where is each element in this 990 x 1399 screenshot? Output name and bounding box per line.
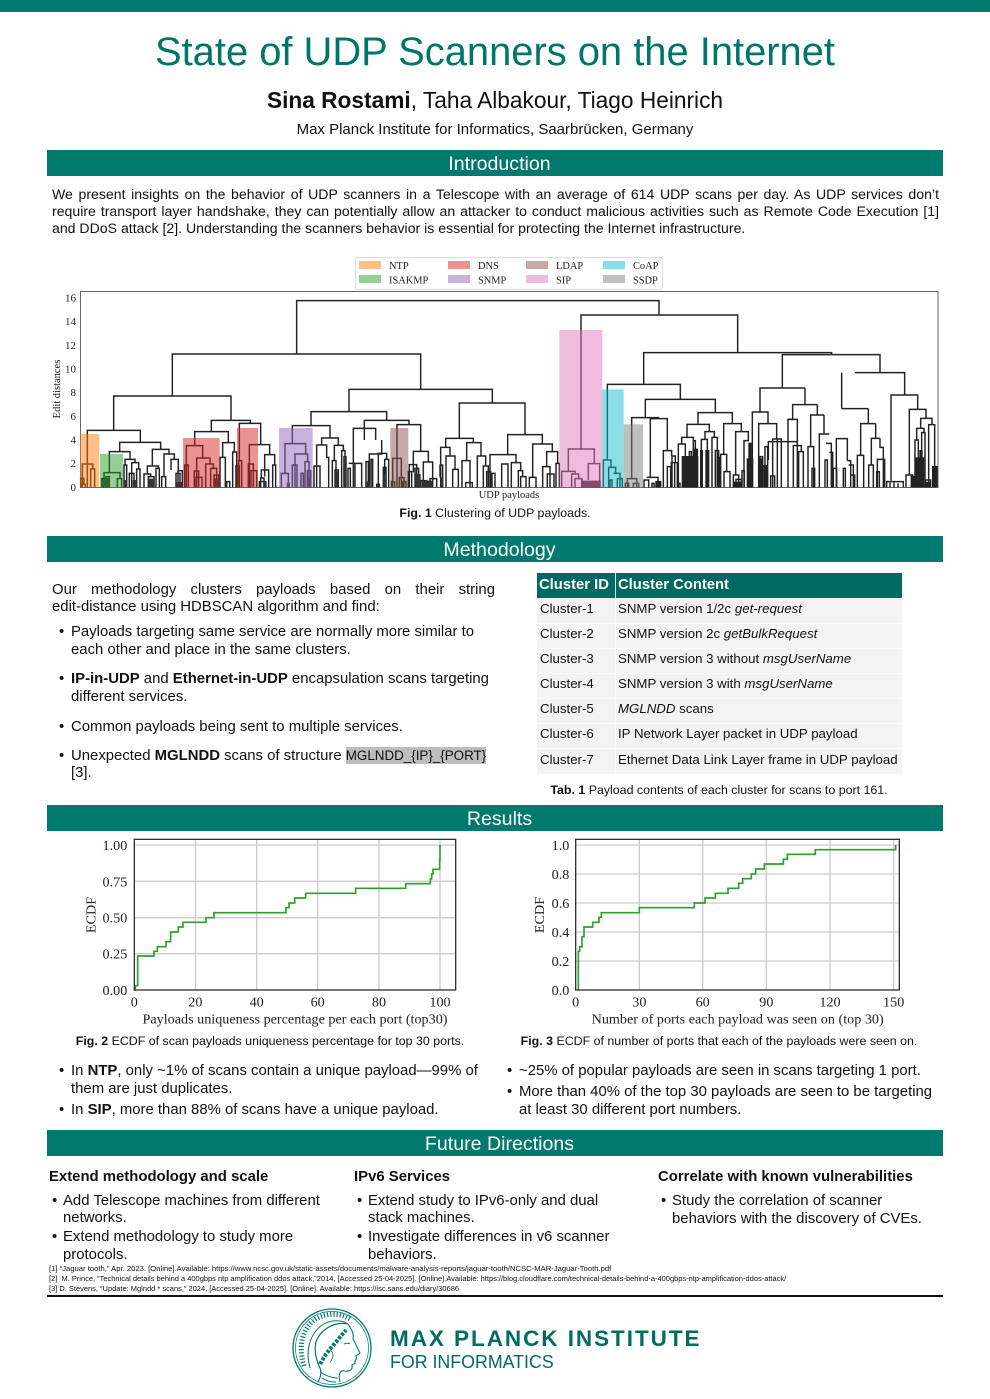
chart: ECDF ports per payload: 90	[759, 995, 773, 1011]
text block: results right: ~25% of popular payloads are seen in scans targeting 1 port.	[519, 1063, 921, 1079]
legend: DNS	[478, 261, 499, 272]
legend: SNMP	[478, 276, 507, 286]
footer rule	[47, 1295, 943, 1297]
column: correlate vulnerabilities: •	[661, 1193, 666, 1209]
table header: Cluster ID	[539, 577, 609, 593]
dendrogram dense leaves left	[101, 457, 443, 487]
table rows: Cluster-3	[540, 651, 594, 666]
table rows: SNMP version 2c getBulkRequest	[618, 626, 817, 641]
column: IPv6 services: •	[357, 1229, 362, 1245]
legend: CoAP	[633, 261, 659, 272]
top banner	[0, 0, 990, 12]
text block: results left: them are just duplicates.	[71, 1081, 232, 1097]
column: extend methodology: •	[52, 1229, 57, 1245]
table rows: IP Network Layer packet in UDP payload	[618, 726, 858, 741]
table rows: SNMP version 3 with msgUserName	[618, 676, 833, 691]
figure 3 caption: Fig. 3 ECDF of number of ports that each of the payloads were seen on.	[521, 1034, 917, 1048]
legend: SIP	[556, 276, 571, 286]
chart: dendrogram clustering of UDP payloads	[52, 257, 938, 501]
bullet list: •	[59, 624, 64, 640]
chart: ECDF payload uniqueness	[83, 838, 456, 1028]
bullet list: •	[59, 748, 64, 764]
dendrogram links left half	[81, 301, 659, 487]
axis ticks and labels	[65, 292, 76, 494]
bullet list: •	[59, 719, 64, 735]
text block: introduction	[52, 186, 939, 236]
table header	[537, 573, 902, 598]
axis ticks and labels: 14	[65, 316, 76, 328]
table rows	[540, 601, 898, 767]
references: [2] M. Prince, “Technical details behind a 400gbps ntp amplification ddos attack,”2014, [Accessed 25-04-2025]. [Online].Available: https://blog.cloudflare.com/technical-details-behind-a-400gbps-ntp-amplification-ddos-attack/	[49, 1274, 786, 1283]
chart: ECDF ports per payload: ECDF	[532, 897, 548, 933]
bullet list: different services.	[71, 689, 187, 705]
chart: ECDF payload uniqueness: 40	[250, 995, 264, 1011]
text block: results left: •	[59, 1102, 64, 1118]
service highlight regions	[80, 330, 643, 487]
bullet list: Unexpected MGLNDD scans of structure MGLNDD_{IP}_{PORT}	[71, 748, 486, 764]
column: extend methodology: Extend methodology and scale	[49, 1169, 268, 1185]
column: IPv6 services: behaviors.	[368, 1247, 437, 1263]
chart: ECDF payload uniqueness: Payloads uniqueness percentage per each port (top30)	[142, 1012, 448, 1028]
heading: Future Directions	[47, 1130, 943, 1156]
chart: ECDF payload uniqueness: 100	[429, 995, 451, 1011]
figure 1 caption: Fig. 1 Clustering of UDP payloads.	[399, 506, 591, 520]
table rows: Cluster-5	[540, 701, 594, 716]
legend: LDAP	[556, 261, 583, 272]
column: correlate vulnerabilities	[658, 1169, 922, 1227]
text block: results left: In SIP, more than 88% of scans have a unique payload.	[71, 1102, 439, 1118]
chart: ECDF ports per payload: 30	[632, 995, 646, 1011]
text block: methodology: edit-distance using HDBSCAN algorithm and find:	[52, 599, 380, 615]
chart: ECDF payload uniqueness: 80	[372, 995, 386, 1011]
column: IPv6 services: stack machines.	[368, 1210, 475, 1226]
logo wordmark: MAX PLANCK INSTITUTE	[390, 1326, 702, 1351]
bullet list	[59, 624, 489, 781]
text block: results right: More than 40% of the top 30 payloads are seen to be targeting	[519, 1084, 932, 1100]
table rows: Cluster-4	[540, 676, 594, 691]
table rows: MGLNDD scans	[618, 701, 714, 716]
text block: results right	[507, 1063, 932, 1118]
table caption: Tab. 1 Payload contents of each cluster for scans to port 161.	[550, 783, 888, 797]
column: extend methodology: protocols.	[63, 1247, 128, 1263]
axis ticks and labels: 12	[65, 340, 76, 352]
text block: results right: •	[507, 1063, 512, 1079]
axis ticks and labels: 8	[70, 387, 76, 399]
text block: introduction: and DDoS attack [2]. Understanding the scanners behavior is essential for protecting the Internet infrastructure.	[52, 220, 745, 236]
text block: introduction: We present insights on the behavior of UDP scanners in a Telescope with an average of 614 UDP scans per day. As UDP services don’t	[52, 186, 939, 202]
bullet list: IP-in-UDP and Ethernet-in-UDP encapsulation scans targeting	[71, 671, 489, 687]
column: IPv6 services: IPv6 Services	[354, 1169, 450, 1185]
column: correlate vulnerabilities: Study the correlation of scanner	[672, 1193, 882, 1209]
bullet list: •	[59, 671, 64, 687]
column: extend methodology: Extend methodology to study more	[63, 1229, 293, 1245]
chart: ECDF ports per payload: 0	[572, 995, 579, 1011]
chart: ECDF payload uniqueness: 20	[188, 995, 202, 1011]
table rows: SNMP version 3 without msgUserName	[618, 651, 851, 666]
chart: ECDF ports per payload: 0.2	[552, 954, 569, 970]
chart: ECDF payload uniqueness: 60	[311, 995, 325, 1011]
column: IPv6 services: Investigate differences in v6 scanner	[368, 1229, 609, 1245]
bullet list: each other and place in the same clusters.	[71, 642, 351, 658]
table rows: Cluster-1	[540, 601, 594, 616]
chart: ECDF ports per payload: 60	[696, 995, 710, 1011]
chart: ECDF ports per payload: 0.6	[552, 896, 569, 912]
axis ticks and labels: 4	[70, 434, 76, 446]
logo wordmark: FOR INFORMATICS	[390, 1351, 554, 1372]
column: correlate vulnerabilities: Correlate with known vulnerabilities	[658, 1169, 913, 1185]
column: extend methodology	[49, 1169, 320, 1263]
chart: ECDF payload uniqueness: 0.25	[103, 947, 127, 963]
table header: Cluster Content	[618, 577, 729, 593]
axis ticks and labels: 16	[65, 292, 76, 304]
dendrogram dense leaf clusters	[582, 443, 938, 487]
text block: results left	[59, 1063, 478, 1118]
chart: ECDF payload uniqueness: 0.00	[103, 983, 127, 999]
column: correlate vulnerabilities: behaviors with the discovery of CVEs.	[672, 1211, 922, 1227]
text block: results right: •	[507, 1084, 512, 1100]
y axis label: Edit distances	[52, 360, 63, 418]
legend: ISAKMP	[389, 276, 428, 286]
axis ticks and labels: 2	[70, 458, 76, 470]
table rows: SNMP version 1/2c get-request	[618, 601, 802, 616]
chart: ECDF ports per payload: 0.8	[552, 867, 569, 883]
heading: Results: Results	[467, 808, 532, 830]
text block: introduction: require transport layer handshake, they can potentially allow an attacker to conduct malicious activities such as Remote Code Execution [1]	[52, 203, 939, 219]
references	[49, 1264, 786, 1293]
chart: ECDF payload uniqueness: 0	[131, 995, 138, 1011]
title: State of UDP Scanners on the Internet	[155, 30, 835, 74]
column: extend methodology: •	[52, 1193, 57, 1209]
logo: Minerva seal	[292, 1308, 372, 1388]
legend	[356, 258, 662, 290]
table rows: Cluster-7	[540, 752, 594, 767]
column: IPv6 services: Extend study to IPv6-only and dual	[368, 1193, 598, 1209]
chart: ECDF ports per payload: 0.4	[552, 925, 569, 941]
chart: ECDF ports per payload: 120	[819, 995, 841, 1011]
authors: Sina Rostami, Taha Albakour, Tiago Heinrich	[267, 87, 723, 113]
heading: Methodology	[47, 536, 943, 562]
dendrogram links right half	[490, 315, 935, 487]
heading: Introduction	[47, 150, 943, 176]
axis ticks and labels: 6	[70, 411, 76, 423]
table: cluster contents	[537, 573, 902, 774]
heading: Results	[47, 805, 943, 831]
column: IPv6 services: •	[357, 1193, 362, 1209]
bullet list: [3].	[71, 765, 92, 781]
text block: results left: •	[59, 1063, 64, 1079]
axis ticks and labels: 0	[70, 482, 76, 494]
chart: ECDF payload uniqueness: 0.75	[103, 874, 127, 890]
table rows: Cluster-2	[540, 626, 594, 641]
chart: ECDF payload uniqueness: 1.00	[103, 838, 127, 854]
references: [1] “Jaguar tooth,” Apr. 2023. [Online].Available: https://www.ncsc.gov.uk/static-assets/documents/malware-analysis-reports/jaguar-tooth/NCSC-MAR-Jaguar-Tooth.pdf	[49, 1264, 611, 1273]
chart: ECDF ports per payload	[532, 838, 904, 1028]
text block: methodology: Our methodology clusters payloads based on their string	[52, 582, 495, 598]
text block: results left: In NTP, only ~1% of scans contain a unique payload—99% of	[71, 1063, 478, 1079]
figure 2 caption: Fig. 2 ECDF of scan payloads uniqueness percentage for top 30 ports.	[76, 1034, 464, 1048]
bullet list: Common payloads being sent to multiple services.	[71, 719, 403, 735]
chart: ECDF ports per payload: 0.0	[552, 983, 569, 999]
chart: ECDF ports per payload: Number of ports each payload was seen on (top 30)	[592, 1012, 884, 1028]
column: extend methodology: networks.	[63, 1210, 127, 1226]
chart: ECDF ports per payload: 1.0	[552, 838, 569, 854]
bullet list: Payloads targeting same service are normally more similar to	[71, 624, 474, 640]
legend: SSDP	[633, 276, 658, 286]
heading: Future Directions: Future Directions	[425, 1133, 574, 1155]
text block: results right: at least 30 different port numbers.	[519, 1102, 741, 1118]
plot frame	[80, 292, 938, 488]
table rows: Cluster-6	[540, 726, 594, 741]
table rows: Ethernet Data Link Layer frame in UDP payload	[618, 752, 898, 767]
logo wordmark	[390, 1326, 702, 1372]
heading: Methodology: Methodology	[443, 539, 556, 561]
references: [3] D. Stevens, “Update: Mglndd * scans,” 2024, [Accessed 25-04-2025]. [Online]. Available: https://isc.sans.edu/diary/30686	[49, 1284, 459, 1293]
text block: methodology	[52, 582, 495, 781]
chart: ECDF ports per payload: 150	[883, 995, 904, 1011]
chart: ECDF payload uniqueness: ECDF	[83, 897, 99, 933]
affiliation: Max Planck Institute for Informatics, Saarbrücken, Germany	[297, 121, 693, 138]
column: IPv6 services	[354, 1169, 610, 1263]
legend: NTP	[389, 261, 409, 272]
chart: ECDF payload uniqueness: 0.50	[103, 910, 127, 926]
column: extend methodology: Add Telescope machines from different	[63, 1193, 320, 1209]
heading: Introduction: Introduction	[448, 153, 551, 175]
x axis label: UDP payloads	[479, 490, 539, 501]
axis ticks and labels: 10	[65, 364, 76, 376]
